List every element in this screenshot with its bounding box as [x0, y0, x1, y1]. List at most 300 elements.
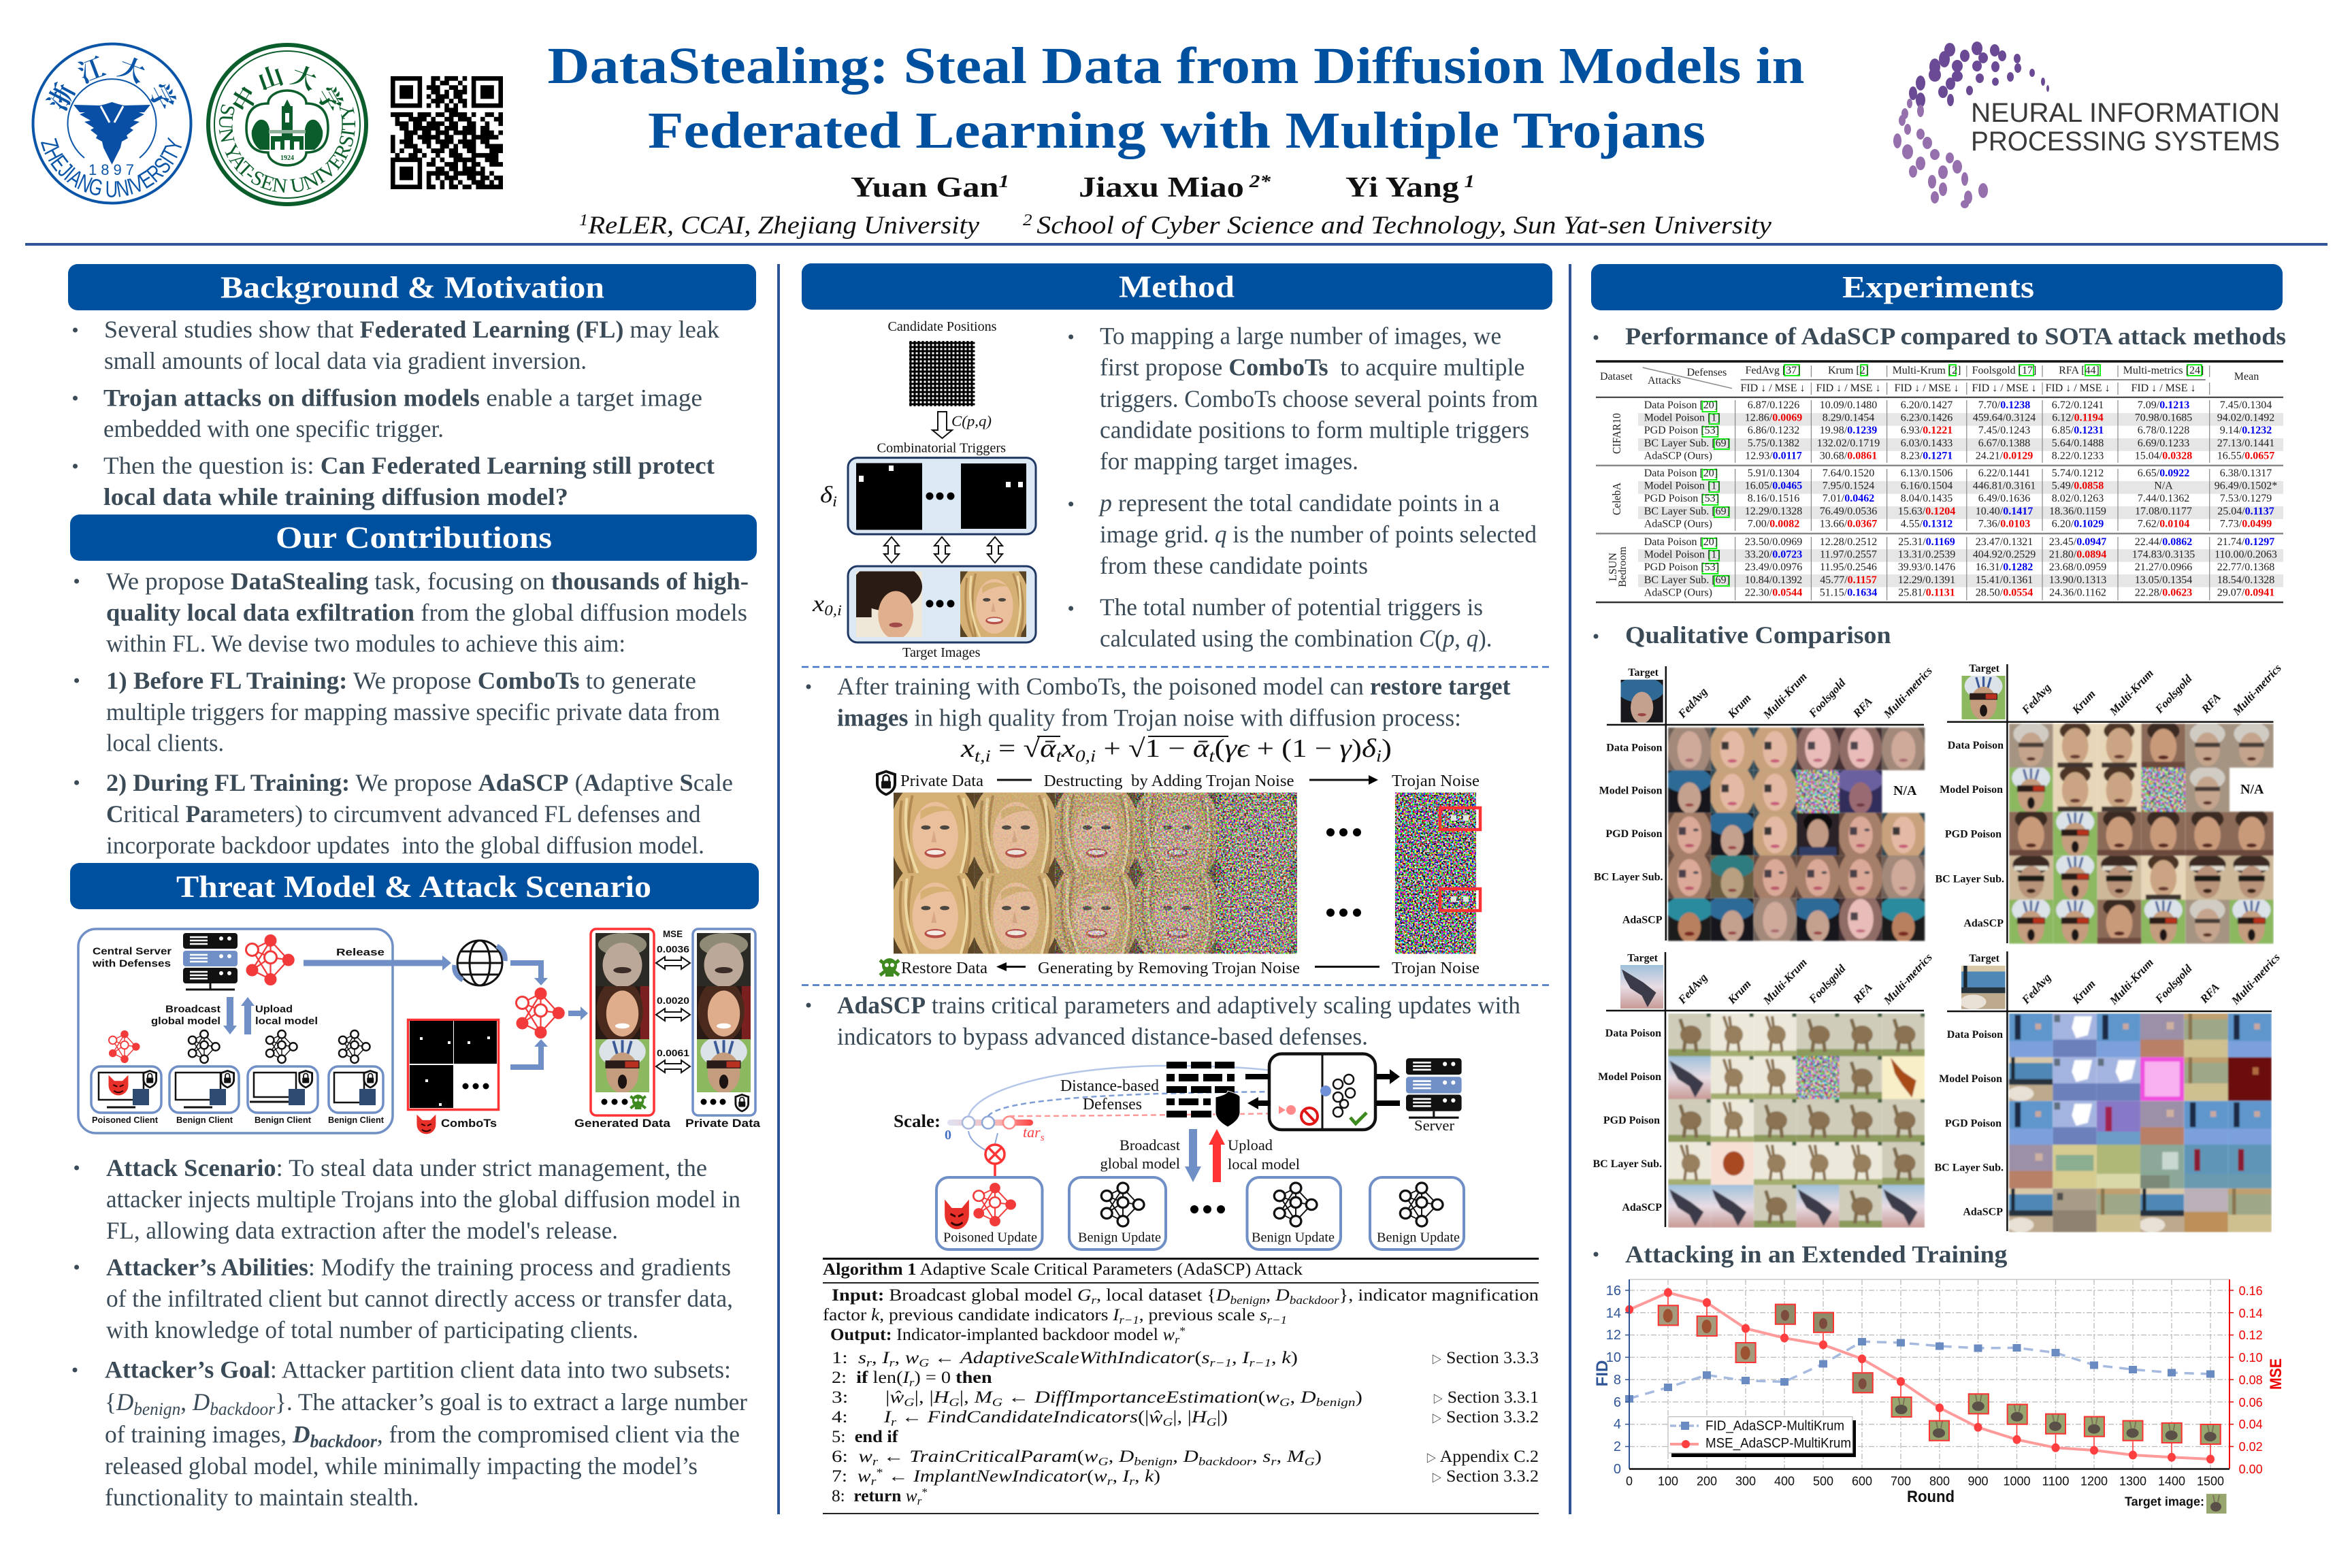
- table: attack performance: FID ↓ / MSE ↓: [1894, 382, 1959, 394]
- federated learning system box: global model: [151, 1015, 220, 1027]
- image grid: bedroom target: Multi-metrics: [2228, 951, 2283, 1007]
- table: attack performance: 459.64/0.3124: [1973, 412, 2036, 424]
- algorithm box: ▷ Section 3.3.2: [1431, 1467, 1539, 1486]
- algorithm box: *: [876, 1466, 883, 1479]
- chart axes and tick labels: Round: [1907, 1488, 1955, 1506]
- algorithm box: r: [872, 1455, 879, 1468]
- table: attack performance: 5.49/0.0858: [2052, 480, 2104, 492]
- heading: Method: Method: [1119, 270, 1235, 304]
- scale slider: Scale:: [894, 1111, 941, 1131]
- algorithm box: DiffImportanceEstimation (w: [1034, 1388, 1277, 1407]
- table: attack performance: 22.77/0.1368: [2217, 561, 2274, 573]
- table: attack performance: FID ↓ / MSE ↓: [1816, 382, 1881, 394]
- table: attack performance: 94.02/0.1492: [2217, 412, 2274, 424]
- image grid: bedroom target: Foolsgold: [2152, 962, 2195, 1006]
- heading: Threat Model & Attack Scenario: [70, 863, 759, 909]
- table: attack performance: 13.90/0.1313: [2049, 574, 2106, 586]
- formula: (: [1215, 734, 1225, 763]
- table: attack performance: 23.50/0.0969: [1745, 536, 1802, 548]
- subheading: qualitative comparison: Qualitative Comparison: [1625, 621, 1891, 649]
- formula: [960, 734, 1392, 766]
- algorithm box: r: [1175, 1333, 1179, 1346]
- table: attack performance: 22.28/0.0623: [2135, 587, 2192, 599]
- algorithm box: 4: I: [832, 1408, 889, 1426]
- table: attack performance: BC Layer Sub. [69]: [1644, 438, 1730, 449]
- formula: i: [1376, 747, 1382, 766]
- table: attack performance: 6.23/0.1426: [1901, 412, 1953, 424]
- image grid: cyclist target: Model Poison: [1940, 784, 2003, 796]
- title: DataStealing: Steal Data from Diffusion Models in: [547, 37, 1805, 95]
- algorithm box: r: [871, 1475, 877, 1488]
- server icon: Server: [1414, 1117, 1455, 1134]
- algorithm box: D: [1182, 1448, 1198, 1466]
- image grid: CelebA hat target: Multi-metrics: [1880, 664, 1935, 721]
- image grid: stealth jet target: PGD Poison: [1603, 1115, 1660, 1126]
- title: [547, 37, 1805, 159]
- image grid: CelebA hat target: Multi-Krum: [1760, 670, 1810, 721]
- text: attack scenario bullets: [72, 1154, 747, 1511]
- table: attack performance: 25.31/0.1169: [1898, 536, 1955, 548]
- table: attack performance: 16.55/0.0657: [2217, 451, 2274, 462]
- algorithm box: I: [1122, 1467, 1130, 1486]
- update boxes: Benign Update: [1377, 1230, 1460, 1245]
- firewall wall and shield: [1060, 1062, 1240, 1127]
- table: attack performance: 8.22/0.1233: [2052, 451, 2104, 462]
- server icon: [1406, 1058, 1462, 1134]
- chart axes and tick labels: 900: [1967, 1475, 1989, 1488]
- table: attack performance: 5.74/0.1212: [2052, 468, 2104, 479]
- chart axes and tick labels: 12: [1606, 1328, 1621, 1343]
- text: attack scenario bullets: Attacker’s Goal: Attacker partition client data into two subsets:: [105, 1356, 731, 1383]
- heading: Method: [802, 263, 1552, 310]
- image grid: CelebA hat target: AdaSCP: [1622, 915, 1663, 926]
- table: attack performance: [1596, 361, 2283, 602]
- algorithm box: r−1: [1249, 1356, 1271, 1369]
- text: ComboTs bullets: p represent the total candidate points in a: [1098, 489, 1500, 517]
- algorithm box: r: [891, 1416, 897, 1428]
- algorithm box: I: [1241, 1349, 1251, 1367]
- table: attack performance: 7.01/0.0462: [1823, 493, 1874, 504]
- table: attack performance: 6.93/0.1221: [1901, 425, 1953, 436]
- table: attack performance: 11.97/0.2557: [1820, 549, 1877, 561]
- table: attack performance: 6.20/0.1029: [2052, 519, 2104, 530]
- algorithm box: |, |: [915, 1388, 934, 1407]
- table: attack performance: FedAvg [37]: [1745, 365, 1801, 376]
- algorithm box: 7: w: [832, 1467, 869, 1486]
- federated learning system box: Poisoned Client: [92, 1115, 159, 1125]
- table: attack performance: 16.05/0.0465: [1745, 480, 1802, 492]
- image grid: CelebA hat target: N/A: [1893, 783, 1917, 798]
- chart axes and tick labels: 400: [1774, 1475, 1795, 1488]
- table: attack performance: 21.80/0.0894: [2049, 549, 2106, 561]
- algorithm box: ImplantNewIndicator (w: [913, 1467, 1105, 1486]
- table: attack performance: Data Poison [20]: [1644, 399, 1718, 411]
- chart axes and tick labels: 0.08: [2239, 1373, 2263, 1387]
- text: AdaSCP bullet: AdaSCP trains critical parameters and adaptively scaling updates with: [837, 992, 1520, 1019]
- text: contributions bullets: local clients.: [106, 730, 224, 757]
- arrows into trojaned model: [510, 960, 588, 1070]
- scale slider: s: [1041, 1132, 1045, 1143]
- algorithm box: ←: [878, 1448, 909, 1466]
- text: contributions bullets: We propose DataStealing task, focusing on thousands of high-: [106, 568, 749, 595]
- table: attack performance: 7.45/0.1304: [2220, 399, 2272, 411]
- algorithm box: D: [1300, 1388, 1316, 1407]
- ComboTs trigger panel: ComboTs: [441, 1117, 497, 1130]
- chart axes and tick labels: 4: [1614, 1417, 1621, 1432]
- text: attack scenario bullets: functionality to maintain stealth.: [105, 1484, 419, 1511]
- algorithm box: benign: [1134, 1455, 1173, 1468]
- image grid: cyclist target: Multi-metrics: [2230, 662, 2284, 718]
- image grid: CelebA hat target: Krum: [1725, 691, 1754, 721]
- chart axes and tick labels: MSE: [2267, 1358, 2285, 1390]
- algorithm box: ▷ Section 3.3.1: [1433, 1388, 1539, 1407]
- bypass curves: [968, 1066, 1326, 1150]
- MSE comparison arrows: [656, 929, 690, 1073]
- formula: t: [1209, 747, 1215, 766]
- image grid: cyclist target: BC Layer Sub.: [1935, 874, 2004, 885]
- table: attack performance: 7.62/0.0104: [2138, 519, 2189, 530]
- table: attack performance: 6.78/0.1228: [2138, 425, 2189, 436]
- chart axes and tick labels: 0.02: [2239, 1440, 2263, 1454]
- algorithm box: ←: [896, 1408, 928, 1426]
- heading: Background & Motivation: Background & Motivation: [220, 270, 604, 305]
- table: attack performance: 7.70/0.1238: [1978, 399, 2030, 411]
- algorithm box: r−1: [1267, 1313, 1287, 1326]
- text: background bullets: Several studies show that Federated Learning (FL) may leak: [104, 316, 719, 343]
- algorithm box: ,: [1277, 1448, 1287, 1466]
- table: attack performance: 6.13/0.1506: [1901, 468, 1953, 479]
- table: attack performance: 18.54/0.1328: [2217, 574, 2274, 586]
- table: attack performance: 6.03/0.1433: [1901, 438, 1953, 449]
- formula: x: [960, 734, 975, 763]
- table: attack performance: 7.53/0.1279: [2220, 493, 2272, 504]
- reverse process caption: Restore Data: [901, 960, 987, 977]
- image grid: bedroom target: Target: [1969, 953, 2000, 964]
- algorithm box: TrainCriticalParam (w: [909, 1448, 1096, 1466]
- table: attack performance: BC Layer Sub. [69]: [1644, 574, 1730, 586]
- algorithm box: G: [1279, 1396, 1290, 1409]
- reverse process caption: [880, 958, 1480, 977]
- algorithm box: k): [1145, 1467, 1159, 1486]
- table: attack performance: 6.12/0.1194: [2052, 412, 2104, 424]
- text: background bullets: local data while training diffusion model?: [103, 483, 568, 510]
- MSE series with sample thumbnails: [1625, 1288, 2221, 1463]
- text: contributions bullets: [74, 568, 749, 859]
- forward process caption: Trojan Noise: [1392, 772, 1480, 790]
- chart axes and tick labels: 200: [1697, 1475, 1717, 1488]
- icon: globe: [455, 941, 505, 985]
- table: attack performance: 6.49/0.1636: [1978, 493, 2030, 504]
- algorithm box: ,: [1173, 1448, 1183, 1466]
- chart axes and tick labels: 1100: [2042, 1475, 2069, 1488]
- chart axes and tick labels: 2: [1614, 1439, 1621, 1454]
- image grid: CelebA hat target: BC Layer Sub.: [1594, 871, 1663, 883]
- firewall wall and shield: Distance-based: [1060, 1077, 1159, 1095]
- table: attack performance: 21.27/0.0966: [2135, 561, 2192, 573]
- algorithm box: ,: [1113, 1467, 1122, 1486]
- formula: 0,i: [1075, 747, 1096, 766]
- chart axes and tick labels: 300: [1735, 1475, 1756, 1488]
- diagram: ComboTs construction: i: [832, 493, 837, 510]
- algorithm box: benign: [1316, 1396, 1356, 1409]
- algorithm box: ): [1315, 1448, 1322, 1466]
- text: attack scenario bullets: D: [192, 1388, 210, 1416]
- table: attack performance: 28.50/0.0554: [1976, 587, 2033, 599]
- diagram: AdaSCP scaling and defense bypass: [894, 1054, 1464, 1250]
- image grid: cyclist target: AdaSCP: [1963, 918, 2004, 930]
- text: attack scenario bullets: , from the compromised client via the: [377, 1421, 740, 1448]
- algorithm box: Algorithm 1 Adaptive Scale Critical Parameters (AdaSCP) Attack: [823, 1260, 1303, 1279]
- table: attack performance: 132.02/0.1719: [1817, 438, 1880, 449]
- table: attack performance: Krum [2]: [1828, 365, 1869, 376]
- text: attack scenario bullets: ,: [180, 1388, 193, 1416]
- table: attack performance: 12.28/0.2512: [1820, 536, 1877, 548]
- text: contributions bullets: incorporate backdoor updates into the global diffusion model.: [106, 832, 704, 859]
- dataset label: CIFAR10: CIFAR10: [1610, 413, 1623, 454]
- table: attack performance: 7.45/0.1243: [1978, 425, 2030, 436]
- algorithm box: G: [949, 1396, 960, 1409]
- federated learning system box: [78, 929, 451, 1133]
- image: Trojan noise: [1395, 793, 1480, 953]
- broadcast and upload arrows: local model: [1228, 1156, 1300, 1173]
- chart axes and tick labels: 0: [1614, 1462, 1621, 1477]
- text: attack scenario bullets: {D: [105, 1388, 134, 1416]
- algorithm box: r: [1107, 1475, 1113, 1488]
- image grid: CelebA hat target: RFA: [1850, 695, 1875, 720]
- affiliations: [579, 212, 1772, 240]
- table: attack performance: 12.29/0.1328: [1745, 506, 1802, 517]
- table: attack performance: 24.21/0.0129: [1976, 451, 2033, 462]
- chart axes and tick labels: 16: [1606, 1284, 1621, 1298]
- algorithm box: }, indicator magnification: [1339, 1286, 1539, 1305]
- MSE comparison arrows: 0.0061: [657, 1047, 689, 1058]
- scale slider: 0: [945, 1128, 951, 1143]
- algorithm box: G: [1207, 1416, 1217, 1428]
- diagram: threat model: [78, 929, 761, 1134]
- algorithm box: *: [921, 1486, 928, 1499]
- table: attack performance: 7.44/0.1362: [2138, 493, 2189, 504]
- algorithm box: D: [1275, 1286, 1290, 1305]
- text: diffusion process bullet: images in high quality from Trojan noise with diffusion process:: [837, 704, 1461, 731]
- broadcast and upload arrows: [1100, 1129, 1300, 1182]
- algorithm box: G: [1163, 1416, 1173, 1428]
- image grid: bedroom target: Data Poison: [1947, 1029, 2003, 1041]
- table: attack performance: 18.36/0.1159: [2049, 506, 2106, 517]
- algorithm box: G: [1305, 1455, 1315, 1468]
- icon: red trojaned network: [516, 987, 565, 1039]
- formula: x: [1061, 734, 1075, 763]
- chart axes and tick labels: 0.06: [2239, 1396, 2263, 1409]
- chart axes and tick labels: 1000: [2004, 1475, 2031, 1488]
- dataset label: LSUN Bedroom: [1607, 546, 1629, 587]
- logo: NeurIPS: PROCESSING SYSTEMS: [1971, 127, 2280, 157]
- algorithm box: ←: [1002, 1388, 1034, 1407]
- algorithm box: ,: [1134, 1467, 1145, 1486]
- title: Federated Learning with Multiple Trojans: [648, 102, 1705, 159]
- table: attack performance: 23.49/0.0976: [1745, 561, 1802, 573]
- federated learning system box: Upload: [255, 1003, 293, 1015]
- formula: = √: [991, 734, 1040, 763]
- table: attack performance: 11.95/0.2546: [1820, 561, 1877, 573]
- logo: Sun Yat-sen University: 中山大学: [233, 65, 344, 110]
- algorithm box: r: [1271, 1455, 1277, 1468]
- algorithm box: r−1: [1210, 1356, 1232, 1369]
- table: attack performance: 12.86/0.0069: [1745, 412, 1802, 424]
- image grid: cyclist target: FedAvg: [2019, 681, 2054, 717]
- algorithm box: H: [1191, 1408, 1208, 1426]
- table: attack performance: 45.77/0.1157: [1820, 574, 1877, 586]
- algorithm box: r−1: [1119, 1313, 1139, 1326]
- algorithm box: ▷ Appendix C.2: [1426, 1448, 1539, 1466]
- algorithm box: ): [1356, 1388, 1362, 1407]
- algorithm box: G: [904, 1396, 915, 1409]
- table: attack performance: 76.49/0.0536: [1820, 506, 1877, 517]
- heading: Our Contributions: Our Contributions: [276, 520, 552, 555]
- server-side filter box: [1245, 1054, 1400, 1130]
- image grid: stealth jet target: Multi-metrics: [1880, 951, 1935, 1007]
- algorithm box: factor k, previous candidate indicators I: [823, 1306, 1119, 1324]
- table: attack performance: 5.91/0.1304: [1748, 468, 1799, 479]
- table: attack performance: 6.69/0.1233: [2138, 438, 2189, 449]
- table: attack performance: 23.45/0.0947: [2049, 536, 2106, 548]
- algorithm box: ,: [1290, 1388, 1301, 1407]
- chart axes and tick labels: 600: [1852, 1475, 1872, 1488]
- algorithm box: r: [917, 1494, 922, 1507]
- algorithm box: |): [1217, 1408, 1228, 1426]
- authors: Yi Yang: [1345, 172, 1441, 203]
- generated data panel: [574, 929, 671, 1130]
- panel: experiments column: [1591, 264, 2286, 1514]
- table: attack performance: 6.86/0.1232: [1748, 425, 1799, 436]
- algorithm box: FindCandidateIndicators (|ŵ: [928, 1408, 1160, 1426]
- table: attack performance: 6.65/0.0922: [2138, 468, 2189, 479]
- table: attack performance: 6.16/0.1504: [1901, 480, 1953, 492]
- algorithm box: , local dataset {: [1096, 1286, 1216, 1305]
- image grid: stealth jet target: Data Poison: [1605, 1028, 1661, 1039]
- diagram: ComboTs construction: Combinatorial Triggers: [877, 441, 1006, 456]
- reverse process caption: Generating by Removing Trojan Noise: [1038, 960, 1300, 977]
- algorithm box: s: [1260, 1306, 1267, 1324]
- text: background bullets: Trojan attacks on diffusion models enable a target image: [103, 384, 702, 411]
- chart axes and tick labels: 700: [1891, 1475, 1911, 1488]
- table: attack performance: 25.81/0.1131: [1898, 587, 1955, 599]
- federated learning system box: Benign Client: [255, 1115, 312, 1125]
- table: attack performance: 8.02/0.1263: [2052, 493, 2104, 504]
- authors: 1: [1459, 172, 1475, 191]
- image grid: bedroom target: FedAvg: [2019, 970, 2054, 1007]
- table: attack performance: 6.38/0.1317: [2220, 468, 2272, 479]
- chart axes and tick labels: 0: [1626, 1475, 1633, 1488]
- table: attack performance: 15.04/0.0328: [2135, 451, 2192, 462]
- algorithm box: r: [909, 1376, 915, 1389]
- table: attack performance: Model Poison [1]: [1644, 549, 1720, 561]
- formula: 1 − ᾱ: [1145, 734, 1207, 763]
- table: attack performance: 174.83/0.3135: [2132, 549, 2195, 561]
- broadcast and upload arrows: Upload: [1228, 1137, 1273, 1154]
- chart axes and tick labels: 1300: [2119, 1475, 2146, 1488]
- text: contributions bullets: within FL. We devise two modules to achieve this aim:: [106, 630, 625, 657]
- scale slider: tar: [1023, 1124, 1041, 1141]
- federated learning system box: local model: [255, 1015, 318, 1027]
- chart axes and tick labels: 14: [1606, 1306, 1621, 1321]
- algorithm box: D: [1118, 1448, 1134, 1466]
- table: attack performance: 25.04/0.1137: [2217, 506, 2274, 517]
- table: attack performance: 8.29/0.1454: [1823, 412, 1874, 424]
- formula: ): [1382, 734, 1392, 763]
- table: attack performance: 6.85/0.1231: [2052, 425, 2104, 436]
- chart axes and tick labels: 6: [1614, 1395, 1621, 1410]
- text: ComboTs bullets: [1068, 323, 1538, 652]
- authors: Yuan Gan: [851, 172, 975, 203]
- table: attack performance: Attacks: [1648, 375, 1681, 387]
- forward process caption: Destructing by Adding Trojan Noise: [1044, 772, 1294, 790]
- text: attack scenario bullets: FL, allowing data extraction after the model's release.: [106, 1217, 618, 1244]
- formula: γϵ + (1 − γ)δ: [1225, 734, 1374, 763]
- table: attack performance: 51.15/0.1634: [1820, 587, 1877, 599]
- image grid: stealth jet target: Krum: [1725, 977, 1754, 1007]
- table: attack performance: Data Poison [20]: [1644, 468, 1718, 479]
- chart axes and tick labels: [1593, 1279, 2285, 1506]
- table: attack performance: 22.30/0.0544: [1745, 587, 1802, 599]
- algorithm box: 6: w: [832, 1448, 870, 1466]
- table: attack performance: 6.67/0.1388: [1978, 438, 2030, 449]
- table: attack performance: Data Poison [20]: [1644, 536, 1718, 548]
- dataset label: LSUN Bedroom: LSUN: [1607, 553, 1619, 581]
- algorithm box: D: [1215, 1286, 1230, 1305]
- table: attack performance: 15.63/0.1204: [1898, 506, 1955, 517]
- heading: Experiments: [1591, 264, 2283, 310]
- table: attack performance: FID ↓ / MSE ↓: [1972, 382, 2037, 394]
- algorithm box: ▷ Section 3.3.3: [1431, 1349, 1539, 1367]
- chart legend: [1668, 1417, 1856, 1457]
- table: attack performance: 6.87/0.1226: [1748, 399, 1799, 411]
- algorithm box: ,: [1266, 1286, 1275, 1305]
- table: attack performance: 12.29/0.1391: [1898, 574, 1955, 586]
- algorithm box: ,: [1252, 1448, 1262, 1466]
- panel: method column: [802, 263, 1552, 1514]
- algorithm box: I: [881, 1349, 891, 1367]
- text: AdaSCP bullet: [806, 992, 1520, 1050]
- text: contributions bullets: Critical Parameters) to circumvent advanced FL defenses and: [106, 800, 701, 828]
- algorithm box: r: [1092, 1294, 1096, 1307]
- image grid: CelebA hat target: [1594, 664, 1935, 948]
- text: attack scenario bullets: backdoor: [310, 1432, 378, 1451]
- diagram: ComboTs construction: [812, 319, 1036, 660]
- algorithm box: ←: [883, 1467, 913, 1486]
- table: attack performance: Multi-Krum [2]: [1893, 365, 1961, 376]
- text: contributions bullets: 1) Before FL Training: We propose ComboTs to generate: [106, 667, 696, 694]
- chart legend: MSE_AdaSCP-MultiKrum: [1705, 1436, 1851, 1451]
- table: attack performance: 70.98/0.1685: [2135, 412, 2192, 424]
- algorithm box: ,: [1109, 1448, 1119, 1466]
- FID series: [1625, 1338, 2215, 1403]
- diagram: ComboTs construction: Candidate Positions: [887, 319, 997, 334]
- chart axes and tick labels: 100: [1658, 1475, 1678, 1488]
- diagram: ComboTs construction: Target Images: [902, 645, 981, 660]
- scale slider: [894, 1111, 1045, 1143]
- panel: left column: [68, 264, 761, 1511]
- subheading: extended training: Attacking in an Extended Training: [1625, 1241, 2007, 1268]
- image grid: cyclist target: Multi-Krum: [2106, 667, 2156, 718]
- authors: [851, 172, 1475, 203]
- text: background bullets: small amounts of local data via gradient inversion.: [104, 347, 587, 374]
- algorithm box: H: [933, 1388, 951, 1407]
- table: attack performance: AdaSCP (Ours): [1644, 451, 1712, 462]
- forward process caption: [876, 770, 1480, 796]
- firewall wall and shield: Defenses: [1083, 1096, 1142, 1113]
- MSE comparison arrows: MSE: [663, 929, 683, 939]
- table: attack performance: 12.93/0.0117: [1745, 451, 1802, 462]
